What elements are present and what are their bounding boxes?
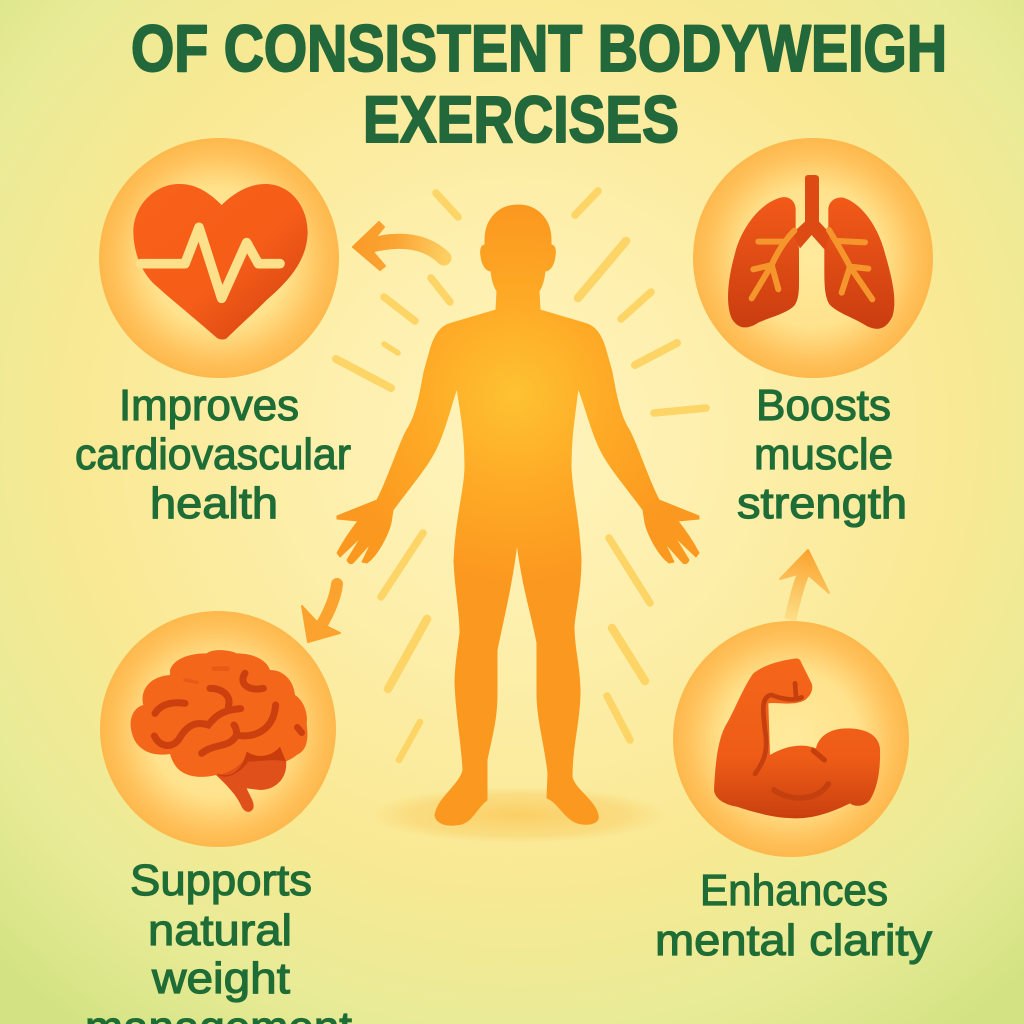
panel: muscle: [673, 621, 909, 857]
icon: heart with pulse: [133, 184, 308, 339]
label: boosts muscle strength: [737, 381, 907, 528]
arrow: muscle to lungs: [780, 550, 829, 620]
label: boosts muscle strength: strength: [737, 479, 907, 528]
ground shadow: [370, 787, 666, 843]
label: supports natural weight management: natural: [148, 906, 292, 955]
label: improves cardiovascular health: health: [150, 479, 278, 528]
panel: lungs: [693, 138, 933, 378]
muscle disc: [673, 621, 909, 857]
label: enhances mental clarity: [655, 866, 932, 965]
title: [131, 0, 947, 156]
label: supports natural weight management: Supports: [130, 856, 312, 905]
icon: brain: [131, 650, 307, 812]
arrow: figure to brain: [302, 584, 340, 642]
label: improves cardiovascular health: cardiovascular: [75, 430, 351, 479]
label: enhances mental clarity: mental clarity: [655, 916, 932, 965]
brain disc: [100, 611, 336, 847]
label: boosts muscle strength: muscle: [754, 430, 893, 479]
human figure silhouette: [337, 205, 699, 825]
panel: brain: [100, 611, 336, 847]
label: supports natural weight management: [85, 856, 352, 1024]
label: enhances mental clarity: Enhances: [700, 866, 888, 915]
title: third line: EXERCISES: [363, 82, 679, 156]
energy rays around the figure: [336, 191, 706, 760]
arrow: figure to heart: [353, 222, 444, 270]
lungs disc: [693, 138, 933, 378]
label: improves cardiovascular health: Improves: [119, 381, 299, 430]
icon: flexed bicep: [714, 658, 880, 818]
label: improves cardiovascular health: [75, 381, 351, 528]
heart disc: [99, 138, 339, 378]
label: boosts muscle strength: Boosts: [756, 381, 891, 430]
label: supports natural weight management: weight: [151, 954, 290, 1003]
icon: lungs: [728, 175, 894, 329]
panel: heart: [99, 138, 339, 378]
